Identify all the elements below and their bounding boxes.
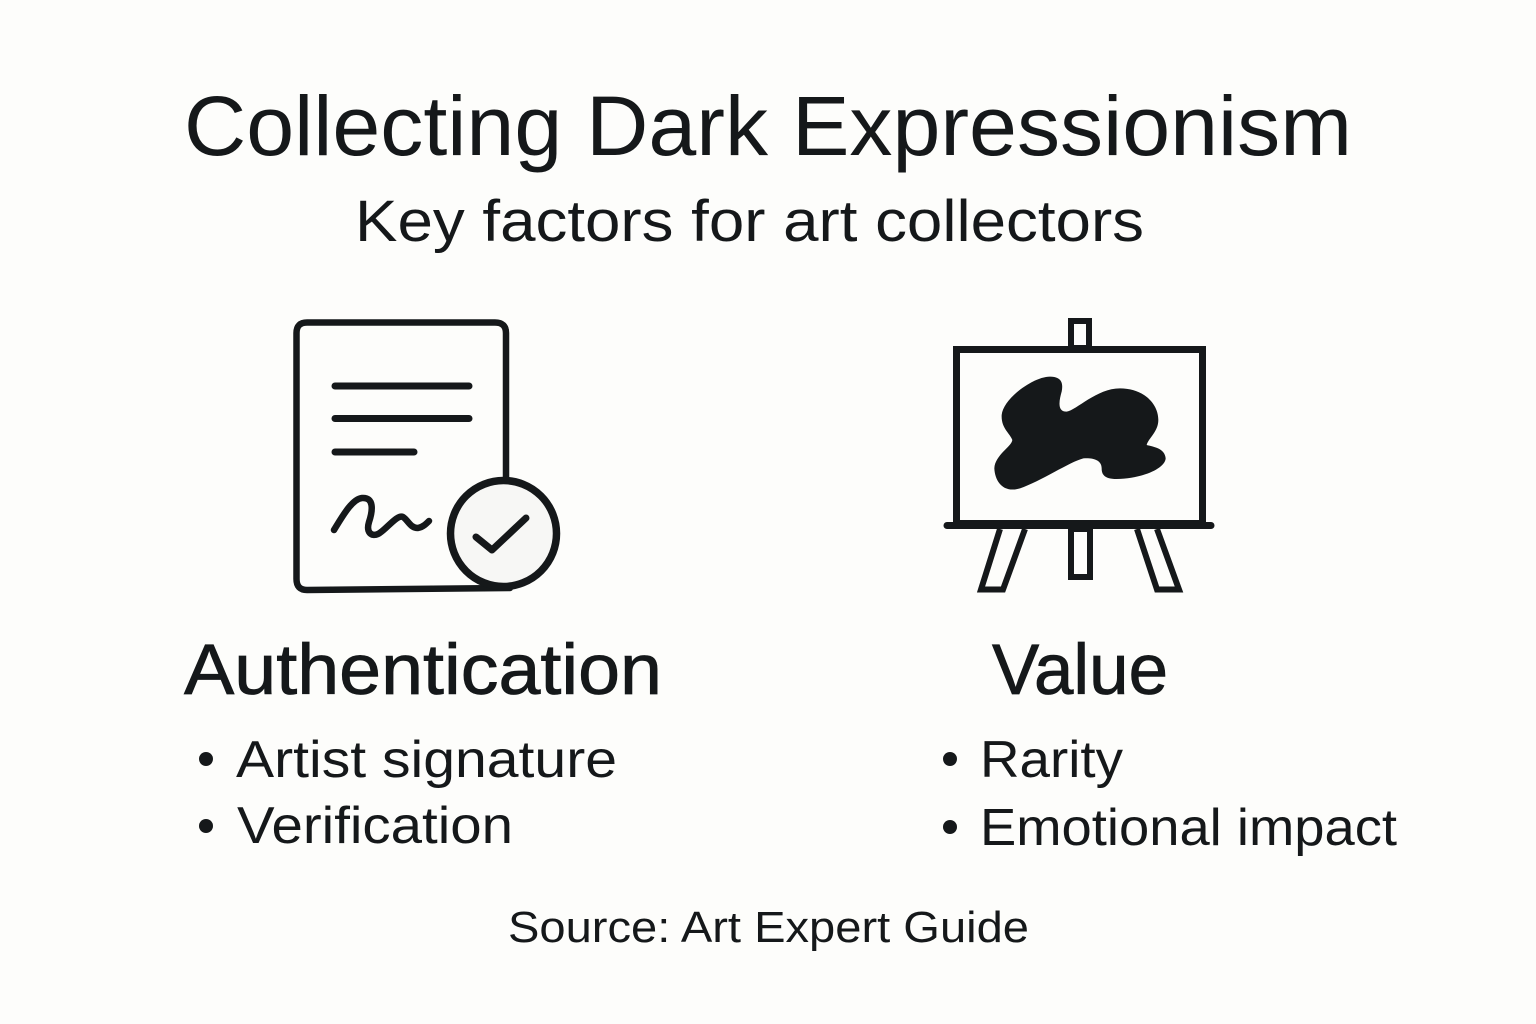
document outline [296,322,510,590]
signature [334,498,429,535]
bullet [943,752,957,766]
item: Rarity: Rarity [980,731,1123,789]
ledge [947,522,1211,529]
bullet [199,752,213,766]
check mark [476,518,526,550]
list: authentication factors [199,731,617,855]
top peg [1071,321,1089,348]
canvas [956,350,1202,524]
check badge [450,480,556,586]
bullet [943,820,957,834]
icon: easel with dark painting [947,321,1211,590]
heading: Value: Value [992,631,1168,710]
center leg [1071,529,1090,577]
item: Artist signature: Artist signature [236,731,617,789]
subtitle: Key factors for art collectors [355,189,1144,254]
item: Verification: Verification [237,797,513,855]
list: value factors [943,731,1398,857]
title: Collecting Dark Expressionism [184,79,1352,173]
left leg [981,529,1025,590]
bullet [199,819,213,833]
heading: Authentication: Authentication [184,631,662,710]
source note: Source: Art Expert Guide [508,903,1029,952]
ink blot [994,377,1166,490]
item: Emotional impact: Emotional impact [980,799,1398,857]
right leg [1137,529,1179,590]
icon: certificate document with signature and check badge [296,322,556,590]
document text lines [335,386,469,452]
